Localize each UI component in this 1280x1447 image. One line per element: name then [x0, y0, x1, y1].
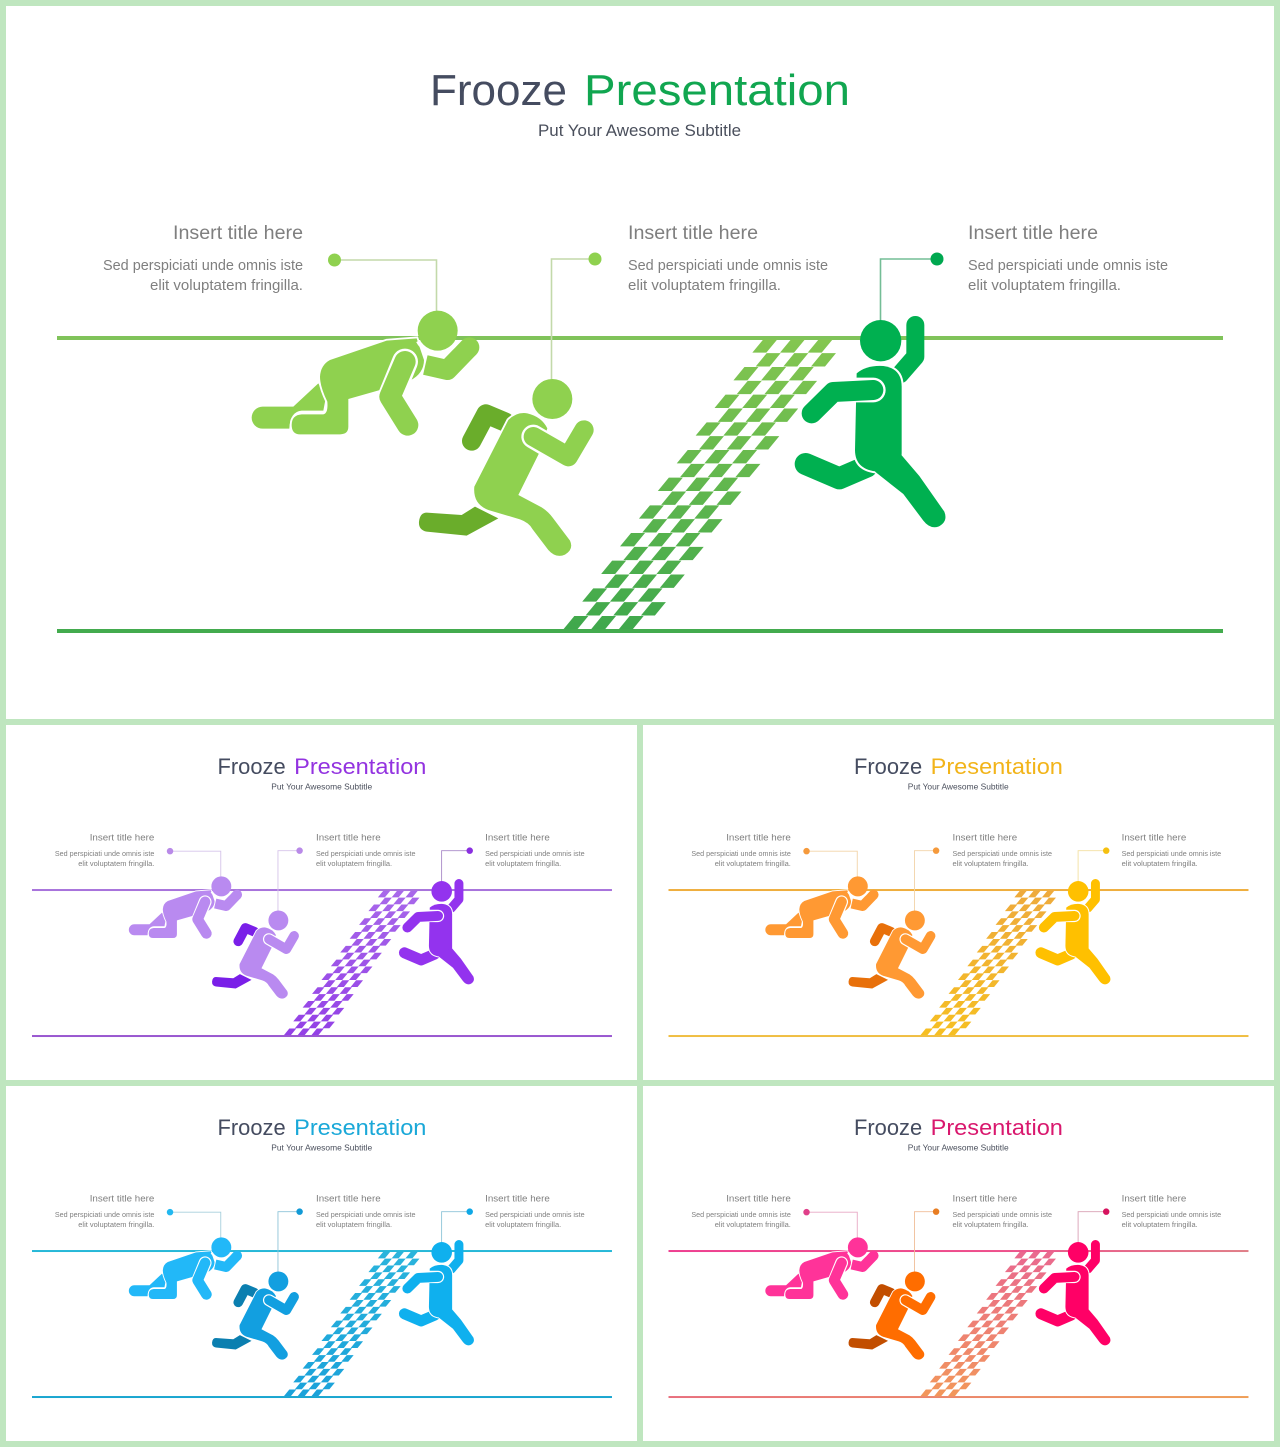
text block 3	[485, 833, 585, 868]
text block 1: elit voluptatem fringilla.	[78, 1220, 154, 1229]
checkered finish strip	[284, 891, 419, 1035]
panel: blue slide	[6, 1086, 637, 1441]
icon: crawling starter	[765, 1237, 874, 1299]
subtitle: Put Your Awesome Subtitle	[538, 121, 741, 140]
text block 1	[55, 1194, 154, 1229]
text block 3	[1122, 1194, 1221, 1229]
dot 1	[803, 848, 810, 854]
dot 2	[933, 1208, 939, 1215]
dot 1	[803, 1209, 810, 1215]
dot 3	[466, 847, 473, 854]
subtitle: Put Your Awesome Subtitle	[908, 781, 1009, 791]
icon: crawling starter	[765, 876, 874, 938]
dot 1	[328, 254, 341, 266]
icon: sprinting runner	[212, 1271, 294, 1360]
connector 1	[806, 1212, 857, 1238]
icon: leaping winner	[1041, 881, 1110, 984]
panel: green main slide	[6, 6, 1274, 719]
text block 2: Insert title here	[316, 833, 381, 844]
dot 2	[588, 252, 602, 266]
title: Frooze	[854, 754, 922, 779]
icon: crawling starter	[252, 311, 469, 434]
subtitle: Put Your Awesome Subtitle	[908, 1142, 1009, 1152]
title: Presentation	[294, 754, 426, 779]
connector 2	[278, 1212, 300, 1272]
text block 1: elit voluptatem fringilla.	[715, 1220, 791, 1229]
dot 2	[296, 1208, 303, 1215]
connector 2	[914, 1212, 936, 1272]
text block 1: Sed perspiciati unde omnis iste	[55, 849, 154, 858]
text block 1	[691, 1194, 791, 1229]
text block 1: Insert title here	[726, 833, 791, 844]
text block 2: Sed perspiciati unde omnis iste	[953, 849, 1052, 858]
checkered finish strip	[284, 1252, 419, 1396]
top track line	[32, 1250, 612, 1252]
text block 3: Insert title here	[485, 1194, 550, 1205]
top track line	[57, 336, 1223, 340]
text block 2: Insert title here	[953, 1194, 1017, 1205]
text block 1: Insert title here	[90, 1194, 154, 1205]
connector 2	[552, 259, 595, 380]
text block 2: Sed perspiciati unde omnis iste	[316, 849, 415, 858]
icon: leaping winner	[404, 1242, 474, 1345]
text block 3	[485, 1194, 585, 1229]
dot 2	[296, 847, 303, 854]
connector 3	[442, 1212, 470, 1243]
text block 1: Sed perspiciati unde omnis iste	[55, 1210, 154, 1219]
top track line	[669, 1250, 1248, 1252]
panel: purple slide	[6, 725, 637, 1080]
icon: crawling starter	[129, 876, 237, 938]
text block 1: elit voluptatem fringilla.	[715, 859, 791, 868]
text block 2	[316, 833, 415, 868]
text block 3: Sed perspiciati unde omnis iste	[1122, 849, 1221, 858]
text block 3: Sed perspiciati unde omnis iste	[485, 1210, 585, 1219]
text block 2: Insert title here	[316, 1194, 381, 1205]
connector 1	[334, 260, 436, 312]
text block 2: elit voluptatem fringilla.	[953, 859, 1029, 868]
connector 3	[1078, 1212, 1106, 1243]
title: Frooze	[430, 66, 567, 115]
text block 2: elit voluptatem fringilla.	[316, 859, 392, 868]
icon: crawling starter	[129, 1237, 237, 1299]
connector 3	[442, 851, 470, 882]
icon: sprinting runner	[849, 910, 931, 999]
text block 2: Insert title here	[628, 223, 758, 244]
bottom track line	[32, 1035, 612, 1037]
text block 3: Sed perspiciati unde omnis iste	[968, 258, 1168, 274]
bottom track line	[669, 1035, 1248, 1037]
subtitle: Put Your Awesome Subtitle	[271, 1142, 373, 1152]
text block 2: elit voluptatem fringilla.	[953, 1220, 1029, 1229]
bottom track line	[669, 1396, 1248, 1398]
text block 1	[55, 833, 154, 868]
title: Presentation	[584, 66, 850, 115]
text block 2: elit voluptatem fringilla.	[628, 278, 781, 294]
icon: leaping winner	[404, 881, 474, 984]
text block 2: Sed perspiciati unde omnis iste	[628, 258, 828, 274]
text block 3: elit voluptatem fringilla.	[1122, 1220, 1198, 1229]
text block 1: Insert title here	[726, 1194, 791, 1205]
text block 3: elit voluptatem fringilla.	[1122, 859, 1198, 868]
text block 1	[103, 223, 303, 294]
text block 2: Sed perspiciati unde omnis iste	[953, 1210, 1052, 1219]
icon: sprinting runner	[849, 1271, 931, 1360]
text block 2: Sed perspiciati unde omnis iste	[316, 1210, 415, 1219]
text block 3	[968, 223, 1168, 294]
connector 1	[170, 851, 221, 877]
dot 1	[167, 848, 173, 854]
panel: pink slide	[643, 1086, 1274, 1441]
text block 3: Insert title here	[968, 223, 1098, 244]
icon: leaping winner	[1041, 1242, 1110, 1345]
text block 3: Sed perspiciati unde omnis iste	[1122, 1210, 1221, 1219]
connector 1	[806, 851, 857, 877]
text block 2	[953, 1194, 1052, 1229]
title: Presentation	[931, 1115, 1063, 1140]
panel: orange slide	[643, 725, 1274, 1080]
title: Frooze	[854, 1115, 922, 1140]
icon: sprinting runner	[212, 910, 294, 999]
connector 3	[1078, 851, 1106, 882]
dot 1	[167, 1209, 173, 1215]
text block 3: Sed perspiciati unde omnis iste	[485, 849, 585, 858]
bottom track line	[57, 629, 1223, 633]
title: Presentation	[294, 1115, 426, 1140]
text block 1: Sed perspiciati unde omnis iste	[691, 849, 791, 858]
checkered finish strip	[920, 1252, 1056, 1396]
dot 3	[466, 1208, 473, 1215]
text block 3: Insert title here	[1122, 833, 1186, 844]
text block 2	[953, 833, 1052, 868]
connector 3	[880, 259, 937, 322]
text block 2: Insert title here	[953, 833, 1017, 844]
icon: leaping winner	[806, 320, 945, 527]
text block 1: Insert title here	[90, 833, 154, 844]
dot 3	[1103, 847, 1109, 854]
top track line	[669, 889, 1248, 891]
text block 3: elit voluptatem fringilla.	[968, 278, 1121, 294]
text block 1: Sed perspiciati unde omnis iste	[691, 1210, 791, 1219]
connector 2	[914, 851, 936, 911]
dot 2	[933, 847, 939, 854]
subtitle: Put Your Awesome Subtitle	[271, 781, 373, 791]
title: Frooze	[218, 1115, 286, 1140]
text block 1: elit voluptatem fringilla.	[150, 278, 303, 294]
text block 1: Insert title here	[173, 223, 303, 244]
text block 1: elit voluptatem fringilla.	[78, 859, 154, 868]
text block 1: Sed perspiciati unde omnis iste	[103, 258, 303, 274]
title: Presentation	[931, 754, 1063, 779]
title: Frooze	[218, 754, 286, 779]
dot 3	[1103, 1208, 1109, 1215]
connector 2	[278, 851, 300, 911]
top track line	[32, 889, 612, 891]
text block 2	[628, 223, 828, 294]
text block 3: elit voluptatem fringilla.	[485, 859, 561, 868]
text block 2	[316, 1194, 415, 1229]
checkered finish strip	[563, 339, 836, 629]
icon: sprinting runner	[419, 379, 584, 556]
text block 3	[1122, 833, 1221, 868]
text block 3: Insert title here	[1122, 1194, 1186, 1205]
bottom track line	[32, 1396, 612, 1398]
text block 2: elit voluptatem fringilla.	[316, 1220, 392, 1229]
dot 3	[930, 252, 944, 266]
connector 1	[170, 1212, 221, 1238]
text block 3: elit voluptatem fringilla.	[485, 1220, 561, 1229]
text block 3: Insert title here	[485, 833, 550, 844]
checkered finish strip	[920, 891, 1056, 1035]
text block 1	[691, 833, 791, 868]
